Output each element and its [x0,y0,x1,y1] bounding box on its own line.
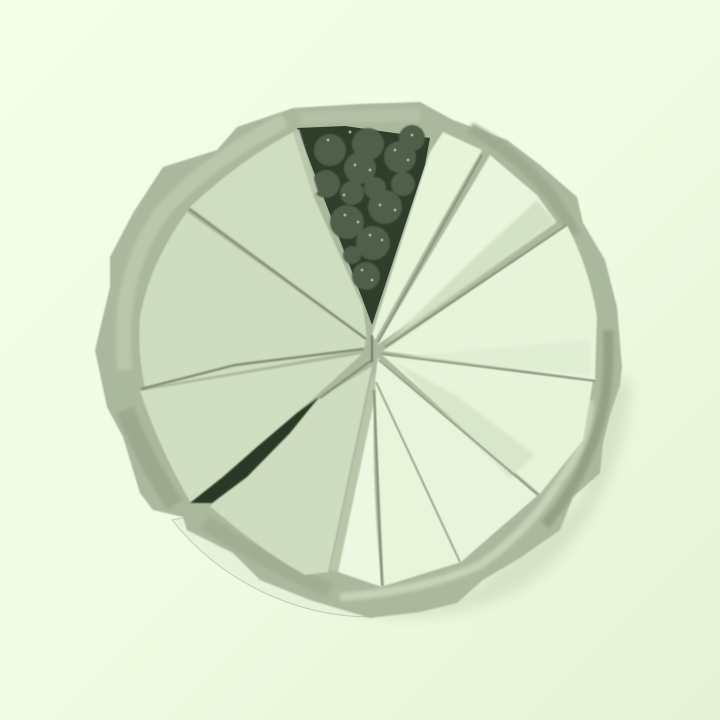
dark cut revealing filling [190,397,319,503]
frosting shading [385,200,590,478]
slice: lower left [140,354,362,503]
crust [95,102,622,618]
band between bottom slices [330,372,376,572]
left slices: unfrosted [139,129,376,575]
berry cluster [312,125,425,290]
crust highlights and shadows [123,115,609,597]
right slices: frosted [338,132,597,587]
slice: lower right [375,358,538,562]
slice: top-left [190,132,367,338]
slice: top narrow [372,132,482,340]
crust strip by filling [293,129,318,195]
slice: bottom left [210,366,372,575]
slice: right lower [381,354,593,494]
slice: left [139,212,366,388]
filling gap: berries [297,125,430,325]
slice: narrow [338,402,382,587]
slice cut lines [141,155,595,586]
plate and shadow [172,380,632,617]
slice: upper right [377,155,556,345]
slice: right upper [383,225,597,380]
slice: bottom [375,380,461,586]
